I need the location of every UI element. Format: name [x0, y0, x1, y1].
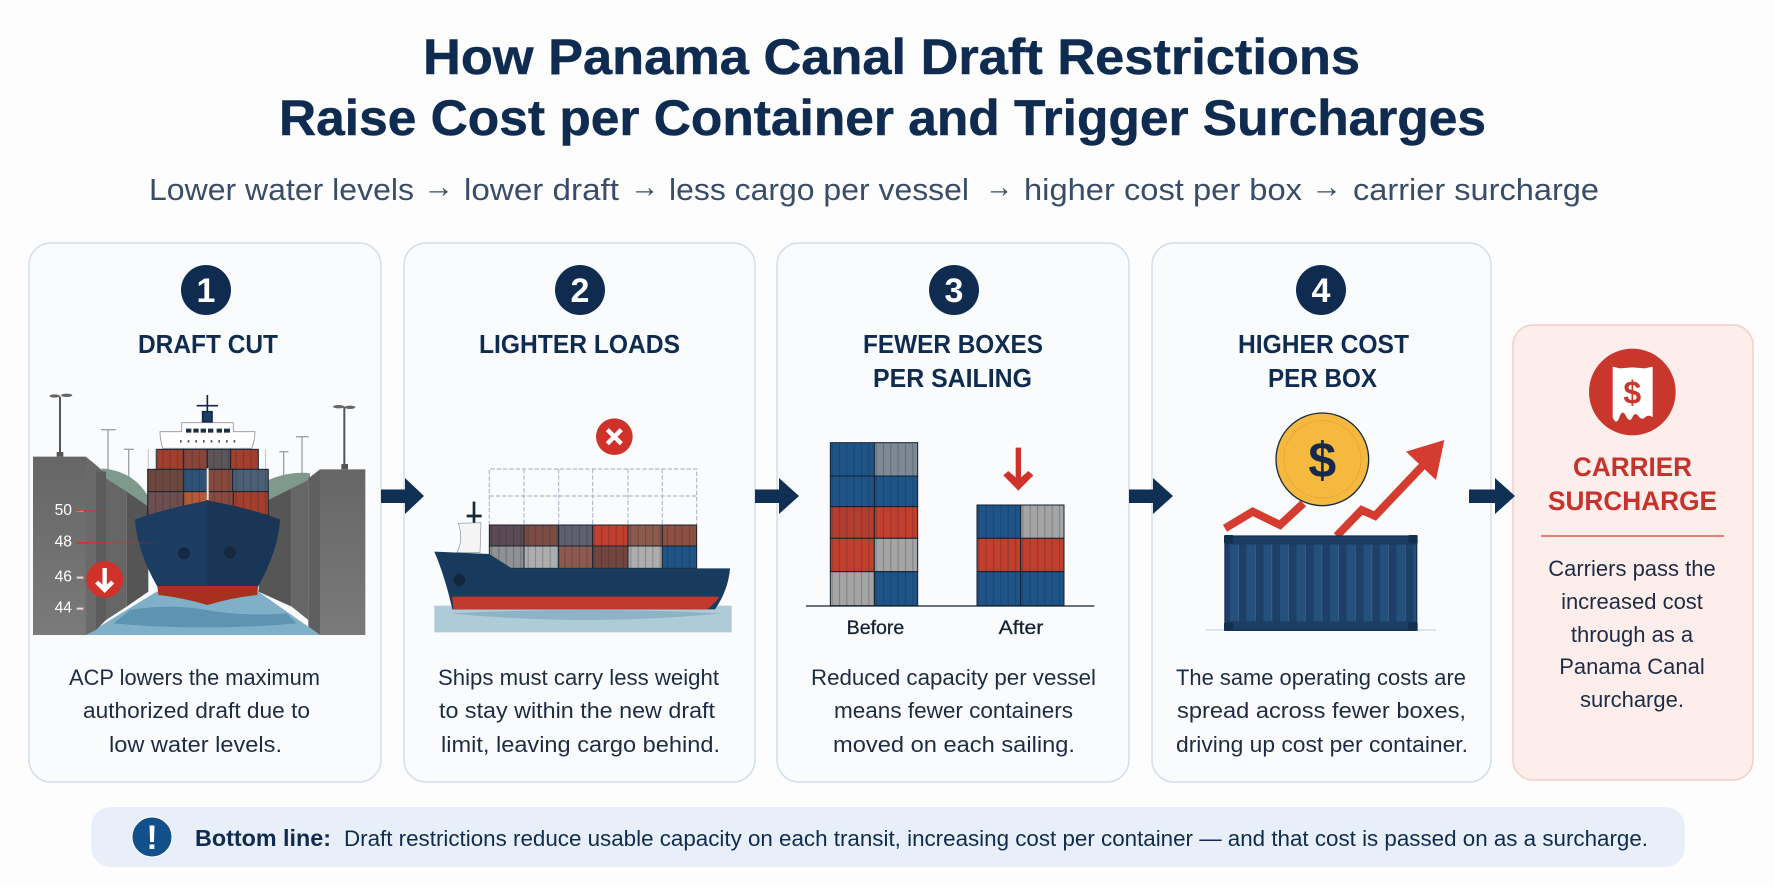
- body text: Ships must carry less weight: [438, 665, 719, 690]
- callout: bottom line: [91, 807, 1685, 867]
- step number 2: [555, 265, 605, 315]
- illustration: before and after container stacks: Before: [847, 618, 904, 639]
- body text: [1176, 665, 1468, 757]
- heading: carrier surcharge: SURCHARGE: [1548, 486, 1717, 516]
- heading: lighter loads: LIGHTER LOADS: [479, 331, 680, 359]
- body text: increased cost: [1561, 589, 1703, 614]
- icon: exclamation: [132, 817, 172, 857]
- illustration: ship in canal lock with draft scale: 50: [55, 502, 72, 519]
- step number 2: 2: [571, 272, 589, 310]
- illustration: under-loaded container ship with empty slots: [434, 418, 732, 632]
- step number 1: [181, 265, 231, 315]
- icon: surcharge receipt: $: [1623, 374, 1641, 410]
- body text: [69, 665, 320, 757]
- body text: surcharge.: [1580, 687, 1684, 712]
- body text: The same operating costs are: [1176, 665, 1466, 690]
- heading: fewer boxes per sailing: FEWER BOXES: [863, 331, 1043, 359]
- body text: authorized draft due to: [83, 698, 310, 723]
- panel: carrier surcharge: [1513, 325, 1753, 780]
- illustration: ship in canal lock with draft scale: 44: [55, 600, 72, 617]
- arrow: step 4 to surcharge: [1469, 478, 1515, 514]
- step number 4: 4: [1312, 272, 1331, 310]
- bottom line text: Bottom line:: [195, 825, 331, 851]
- panel: step 3 fewer boxes per sailing: [777, 243, 1129, 782]
- heading: draft cut: DRAFT CUT: [138, 331, 278, 359]
- subtitle: less cargo per vessel: [669, 172, 969, 207]
- body text: limit, leaving cargo behind.: [441, 732, 720, 757]
- step number 4: [1296, 265, 1346, 315]
- step number 3: 3: [945, 272, 963, 310]
- subtitle: Lower water levels: [149, 172, 414, 207]
- body text: [811, 665, 1096, 757]
- body text: driving up cost per container.: [1176, 732, 1468, 757]
- title: How Panama Canal Draft Restrictions: [423, 29, 1360, 85]
- body text: to stay within the new draft: [439, 698, 715, 723]
- subtitle: →: [985, 169, 1013, 204]
- title: [279, 29, 1486, 146]
- heading: fewer boxes per sailing: PER SAILING: [873, 365, 1032, 393]
- illustration: coin, rising arrow and container: $: [1308, 432, 1336, 488]
- body text: [438, 665, 720, 757]
- body text: [1548, 556, 1716, 712]
- panel: step 2 lighter loads: [404, 243, 755, 782]
- subtitle: [149, 169, 1599, 207]
- step number 3: [929, 265, 979, 315]
- body text: through as a: [1571, 622, 1694, 647]
- illustration: coin, rising arrow and container: [1206, 413, 1444, 631]
- subtitle: lower draft: [464, 172, 619, 207]
- arrow: step 3 to 4: [1129, 478, 1173, 514]
- arrow: step 2 to 3: [755, 478, 799, 514]
- icon: surcharge receipt: [1589, 349, 1676, 435]
- panel: step 1 draft cut: [29, 243, 381, 782]
- subtitle: →: [1311, 169, 1342, 204]
- bottom line text: Draft restrictions reduce usable capacity on each transit, increasing cost per container — and that cost is passed on as a surcharge.: [344, 826, 1648, 851]
- arrow: step 1 to 2: [381, 478, 424, 514]
- subtitle: →: [423, 169, 454, 204]
- panel: step 4 higher cost per box: [1152, 243, 1491, 782]
- step number 1: 1: [197, 272, 215, 310]
- illustration: before and after container stacks: After: [999, 618, 1043, 639]
- body text: low water levels.: [109, 732, 282, 757]
- illustration: ship in canal lock with draft scale: 46: [55, 569, 72, 586]
- heading: fewer boxes per sailing: [863, 331, 1043, 393]
- body text: Reduced capacity per vessel: [811, 665, 1096, 690]
- title: Raise Cost per Container and Trigger Surcharges: [279, 90, 1486, 146]
- body text: means fewer containers: [834, 698, 1073, 723]
- subtitle: carrier surcharge: [1353, 172, 1599, 207]
- body text: moved on each sailing.: [833, 732, 1075, 757]
- heading: higher cost per box: [1238, 331, 1409, 393]
- icon: exclamation: !: [146, 819, 158, 857]
- body text: Panama Canal: [1559, 654, 1705, 679]
- heading: carrier surcharge: [1548, 452, 1717, 516]
- heading: higher cost per box: PER BOX: [1268, 365, 1377, 393]
- illustration: ship in canal lock with draft scale: 48: [55, 534, 72, 551]
- illustration: ship in canal lock with draft scale: [33, 394, 365, 635]
- illustration: before and after container stacks: [806, 443, 1094, 639]
- subtitle: higher cost per box: [1024, 172, 1303, 207]
- body text: Carriers pass the: [1548, 556, 1716, 581]
- body text: spread across fewer boxes,: [1177, 698, 1466, 723]
- body text: ACP lowers the maximum: [69, 665, 320, 690]
- heading: higher cost per box: HIGHER COST: [1238, 331, 1409, 359]
- subtitle: →: [630, 169, 659, 204]
- heading: carrier surcharge: CARRIER: [1573, 452, 1692, 482]
